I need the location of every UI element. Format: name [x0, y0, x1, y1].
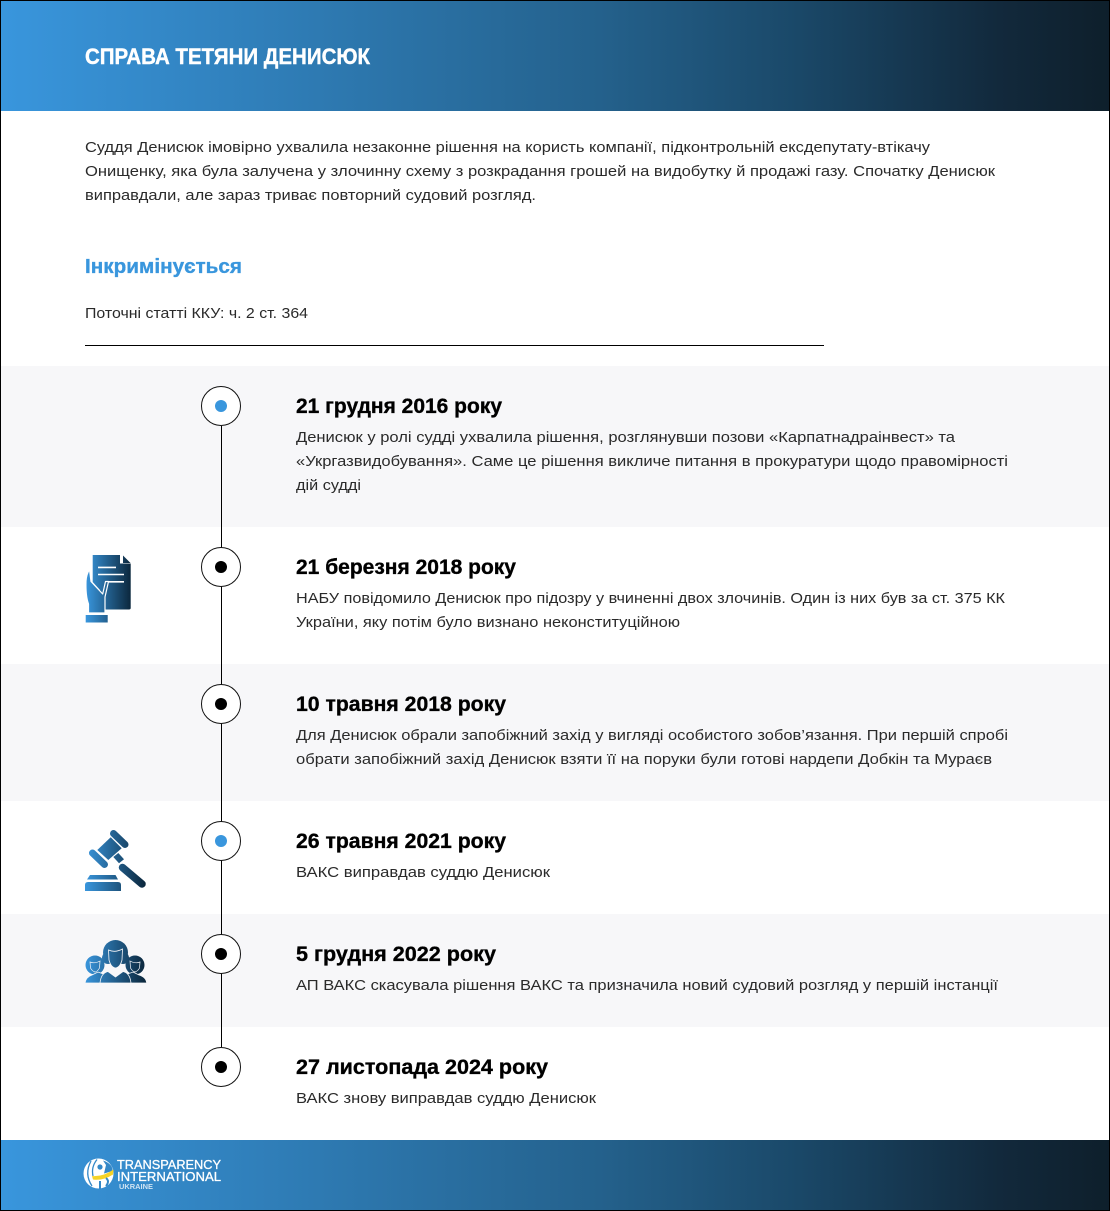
logo: Transparency International Ukraine: INTERNATIONAL — [117, 1169, 221, 1184]
description: ВАКС виправдав суддю Денисюк — [296, 864, 550, 881]
description: обрати запобіжний захід Денисюк взяти її на поруки були готові нардепи Добкін та Мураєв — [296, 751, 992, 768]
current articles: Поточні статті ККУ: ч. 2 ст. 364 — [85, 305, 308, 322]
intro paragraph — [85, 139, 995, 204]
timeline entry: 27 November 2024 — [202, 1048, 596, 1107]
date: 10 травня 2018 року — [296, 693, 506, 716]
description — [296, 590, 1005, 631]
icon: group of people — [85, 940, 147, 983]
title: СПРАВА ТЕТЯНИ ДЕНИСЮК — [85, 44, 371, 69]
timeline entry: 21 March 2018 — [86, 548, 1005, 631]
description — [296, 429, 1008, 494]
header banner — [0, 0, 1110, 111]
marker — [202, 548, 240, 586]
marker — [202, 684, 240, 724]
marker — [202, 386, 240, 426]
date: 21 грудня 2016 року — [296, 395, 502, 418]
footer banner — [0, 1140, 1110, 1211]
intro paragraph: виправдали, але зараз триває повторний судовий розгляд. — [85, 187, 536, 204]
logo: Transparency International Ukraine — [84, 1157, 221, 1191]
marker — [202, 934, 240, 974]
marker — [202, 822, 240, 860]
intro paragraph: Онищенку, яка була залучена у злочинну схему з розкрадання грошей на видобутку й продажі газу. Спочатку Денисюк — [85, 163, 995, 180]
description: АП ВАКС скасувала рішення ВАКС та призначила новий судовий розгляд у першій інстанції — [296, 977, 999, 994]
description: НАБУ повідомило Денисюк про підозру у вчиненні двох злочинів. Один із них був за ст. 375 КК — [296, 590, 1005, 607]
description: Для Денисюк обрали запобіжний захід у вигляді особистого зобов’язання. При першій спробі — [296, 727, 1008, 744]
date: 5 грудня 2022 року — [296, 943, 496, 966]
description — [296, 727, 1008, 768]
timeline entry: 26 May 2021 — [85, 822, 550, 891]
timeline entry: 5 December 2022 — [85, 934, 999, 994]
description: Денисюк у ролі судді ухвалила рішення, розглянувши позови «Карпатнадраінвест» та — [296, 429, 956, 446]
date: 27 листопада 2024 року — [296, 1056, 548, 1079]
description: України, яку потім було визнано неконституційною — [296, 614, 680, 631]
description: дій судді — [296, 477, 361, 494]
icon: gavel — [85, 834, 142, 891]
logo: Transparency International Ukraine: TRANSPARENCY — [117, 1157, 221, 1172]
timeline axis — [221, 426, 222, 1047]
icon: hand holding document — [86, 555, 131, 622]
logo: Transparency International Ukraine: UKRAINE — [119, 1184, 153, 1191]
date: 21 березня 2018 року — [296, 556, 516, 579]
description: «Укргазвидобування». Саме це рішення викличе питання в прокуратури щодо правомірності — [296, 453, 1008, 470]
intro paragraph: Суддя Денисюк імовірно ухвалила незаконне рішення на користь компанії, підконтрольній ексдепутату-втікачу — [85, 139, 931, 156]
timeline entry: 21 December 2016 — [202, 386, 1008, 494]
date: 26 травня 2021 року — [296, 830, 506, 853]
marker — [202, 1048, 240, 1086]
heading: charges: Інкримінується — [85, 256, 242, 278]
description: ВАКС знову виправдав суддю Денисюк — [296, 1090, 596, 1107]
timeline entry: 10 May 2018 — [202, 684, 1008, 768]
timeline band backgrounds — [0, 366, 1110, 1027]
